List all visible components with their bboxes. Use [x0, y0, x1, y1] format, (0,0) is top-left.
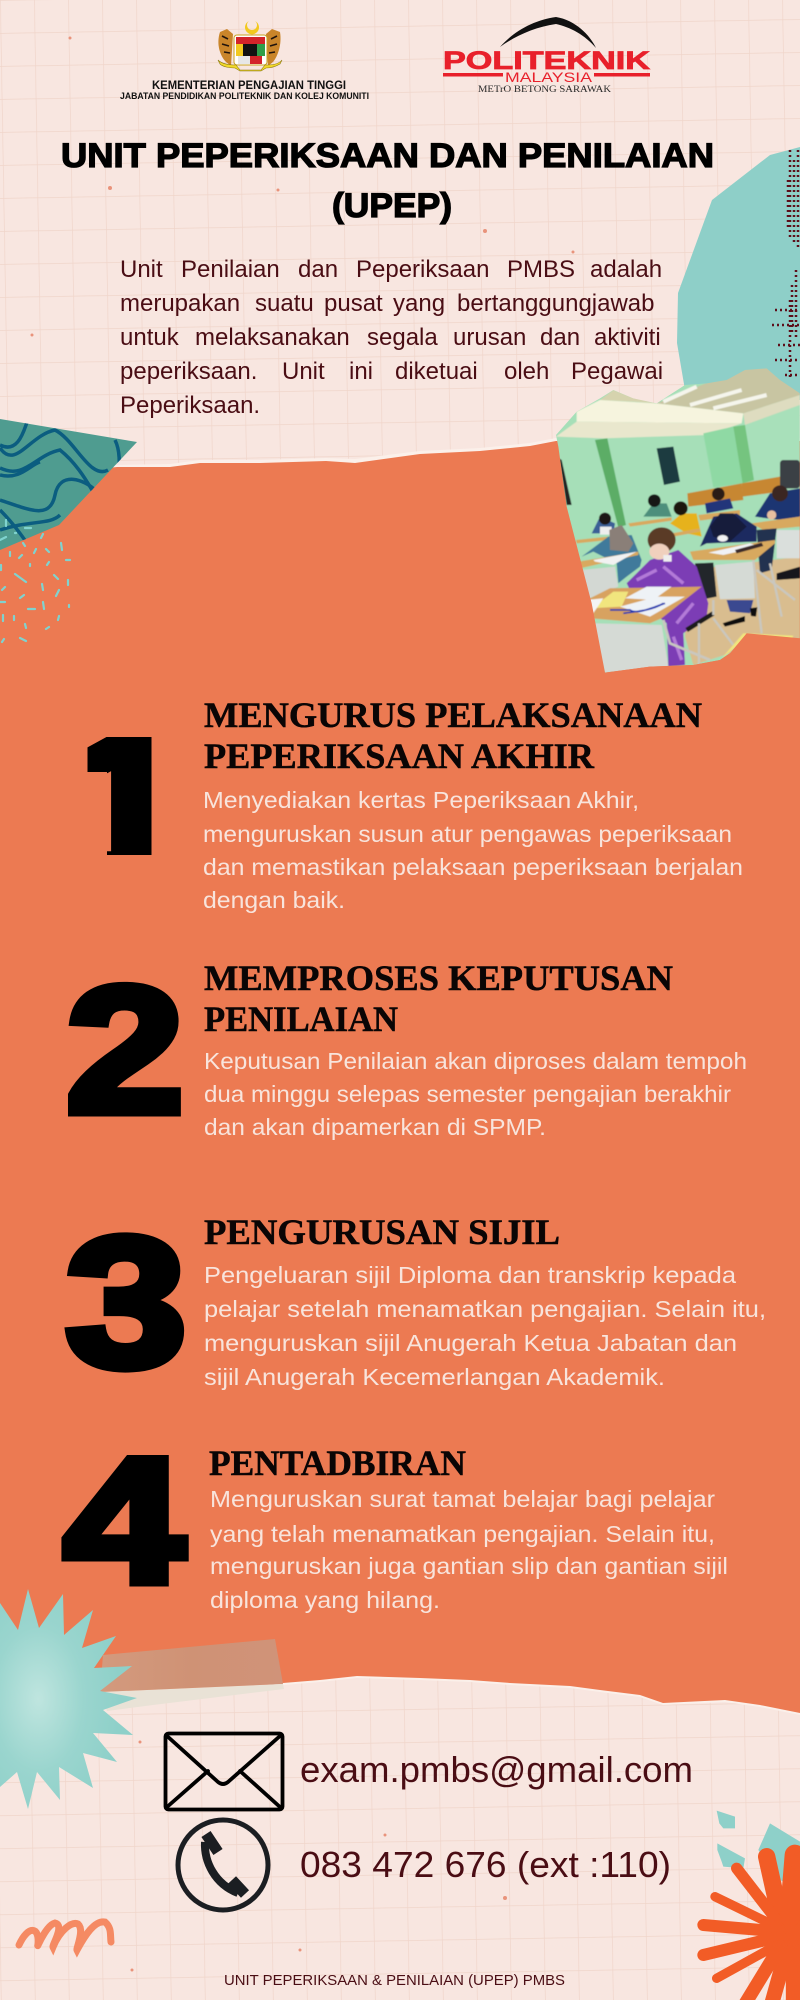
logo caption: ministry: KEMENTERIAN PENGAJIAN TINGGI [152, 80, 346, 92]
mint starburst [0, 1589, 137, 1809]
intro paragraph: Peperiksaan [356, 256, 489, 283]
item 4: text [209, 1443, 728, 1613]
icon: envelope [166, 1734, 282, 1810]
orange flower [703, 1855, 800, 2000]
logo caption: ministry: JABATAN PENDIDIKAN POLITEKNIK DAN KOLEJ KOMUNITI [120, 91, 369, 102]
item 4: text: diploma yang hilang. [210, 1587, 440, 1613]
intro paragraph: Unit [282, 358, 325, 385]
intro paragraph: segala [367, 324, 438, 351]
intro paragraph: Unit [120, 256, 163, 283]
item 1: text: dan memastikan pelaksaan peperiksaan berjalan [203, 854, 743, 880]
title: UNIT PEPERIKSAAN DAN PENILAIAN [61, 137, 714, 175]
title: (UPEP) [332, 187, 452, 225]
intro paragraph: aktiviti [594, 324, 661, 351]
item 2: text: dua minggu selepas semester pengajian berakhir [204, 1081, 731, 1107]
item 1: number: 1 [61, 692, 197, 922]
item 2: text: dan akan dipamerkan di SPMP. [204, 1114, 546, 1140]
intro paragraph: bertanggungjawab [457, 290, 654, 317]
item 1: text [203, 695, 743, 913]
item 1: text: MENGURUS PELAKSANAAN [204, 695, 702, 735]
item 3: text: PENGURUSAN SIJIL [204, 1212, 560, 1252]
logo: Politeknik Malaysia [443, 17, 650, 95]
item 3: text: sijil Anugerah Kecemerlangan Akademik. [204, 1364, 665, 1390]
intro paragraph: diketuai [395, 358, 478, 385]
photo: students sitting an exam [550, 367, 800, 677]
item 3: text: pelajar setelah menamatkan pengajian. Selain itu, [204, 1296, 766, 1322]
icon: telephone [178, 1820, 268, 1910]
title [61, 137, 714, 225]
logo: Politeknik Malaysia: METrO BETONG SARAWAK [478, 85, 611, 95]
intro paragraph: suatu [255, 290, 314, 317]
teal wave shape left [0, 419, 137, 555]
orange torn corner over photo [605, 637, 800, 680]
contact: email: exam.pmbs@gmail.com [300, 1749, 693, 1790]
squiggle decoration [19, 1922, 111, 1950]
intro paragraph: melaksanakan [195, 324, 350, 351]
intro paragraph: untuk [120, 324, 180, 351]
item 1: text: menguruskan susun atur pengawas peperiksaan [203, 821, 732, 847]
item 4: number: 4 [64, 1422, 184, 1621]
intro paragraph: urusan [453, 324, 526, 351]
item 2: number: 2 [66, 949, 184, 1150]
item 4: text: PENTADBIRAN [209, 1443, 466, 1483]
logo: Politeknik Malaysia: POLITEKNIK [443, 47, 650, 75]
intro paragraph: merupakan [120, 290, 240, 317]
mint blob top right [677, 147, 800, 400]
intro paragraph: PMBS [507, 256, 575, 283]
intro paragraph: oleh [504, 358, 549, 385]
item 1: text: PEPERIKSAAN AKHIR [204, 736, 595, 776]
contact: telephone number: 083 472 676 (ext :110) [300, 1844, 671, 1885]
logo caption: ministry [120, 80, 369, 102]
mint confetti dashes [0, 520, 70, 642]
item 4: text: yang telah menamatkan pengajian. Selain itu, [210, 1521, 715, 1547]
intro paragraph: peperiksaan. [120, 358, 257, 385]
intro paragraph: yang [393, 290, 445, 317]
item 2: text: MEMPROSES KEPUTUSAN [204, 958, 673, 998]
item 3: text: menguruskan sijil Anugerah Ketua Jabatan dan [204, 1330, 737, 1356]
intro paragraph: Peperiksaan. [120, 392, 260, 419]
intro paragraph: Pegawai [571, 358, 663, 385]
intro paragraph: dan [540, 324, 580, 351]
logo: Malaysia crest [218, 21, 282, 71]
item 1: text: dengan baik. [203, 887, 345, 913]
item 4: text: menguruskan juga gantian slip dan gantian sijil [210, 1553, 728, 1579]
item 3: text [204, 1212, 766, 1390]
intro paragraph: ini [349, 358, 373, 385]
logo: Politeknik Malaysia: MALAYSIA [505, 70, 592, 85]
item 1: text: Menyediakan kertas Peperiksaan Akhir, [203, 787, 639, 813]
item 3: number: 3 [65, 1199, 187, 1405]
item 2: text [204, 958, 747, 1140]
washi tape [100, 1639, 284, 1711]
mint brush marks [717, 1811, 800, 1890]
intro paragraph [120, 256, 663, 419]
item 3: text: Pengeluaran sijil Diploma dan transkrip kepada [204, 1262, 736, 1288]
intro paragraph: dan [298, 256, 338, 283]
footer: UNIT PEPERIKSAAN & PENILAIAN (UPEP) PMBS [224, 1972, 565, 1989]
intro paragraph: Penilaian [181, 256, 280, 283]
item 4: text: Menguruskan surat tamat belajar bagi pelajar [210, 1486, 715, 1512]
orange torn-paper panel [0, 438, 800, 1722]
item 2: text: PENILAIAN [204, 999, 398, 1039]
intro paragraph: adalah [590, 256, 662, 283]
item 2: text: Keputusan Penilaian akan diproses dalam tempoh [204, 1048, 747, 1074]
intro paragraph: pusat [324, 290, 383, 317]
